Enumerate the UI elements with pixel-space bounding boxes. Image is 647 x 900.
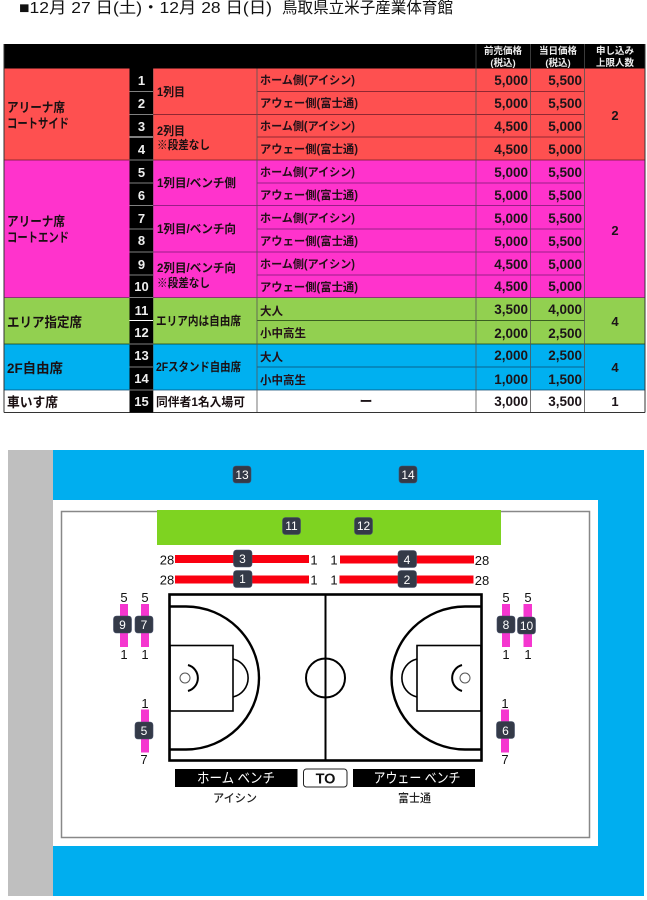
panel: 2F free seating rows: 2Fスタンド自由席 <box>156 359 241 374</box>
home bench: アイシン <box>213 792 257 805</box>
TO table: TO <box>316 772 335 788</box>
seat number column: 1 <box>138 73 145 88</box>
panel: arena court end rows: 2列目/ベンチ向 <box>157 260 236 275</box>
seat number column: 10 <box>134 279 149 294</box>
seat row end numbers: 1 <box>310 572 318 588</box>
panel: arena floor <box>53 500 598 846</box>
title <box>19 0 453 17</box>
panel: arena courtside rows: 2列目 <box>157 124 185 138</box>
seat badges: 4 <box>404 553 411 567</box>
panel: arena courtside rows: 5,000 <box>548 142 582 157</box>
panel: arena courtside rows: 1列目 <box>157 85 185 99</box>
panel: arena courtside rows: 5,500 <box>548 73 582 88</box>
panel: arena courtside rows: ホーム側(アイシン) <box>260 74 355 87</box>
table header: 前売価格 <box>484 45 522 57</box>
panel: arena court end rows: 5,000 <box>548 279 582 294</box>
seat badges: 10 <box>520 619 533 633</box>
panel: arena court end rows: コートエンド <box>7 230 69 245</box>
seat badges: 12 <box>357 519 370 533</box>
seat row end numbers: 1 <box>141 647 149 662</box>
panel: arena courtside rows: 5,000 <box>494 73 528 88</box>
table header: 上限人数 <box>596 57 634 69</box>
home bench: ホーム ベンチ <box>197 770 275 786</box>
seat badges: 9 <box>119 618 126 632</box>
seat number column: 9 <box>138 257 145 272</box>
panel: wheelchair row: 1 <box>611 394 619 409</box>
panel: arena courtside rows <box>4 68 645 160</box>
panel: area reserved zone <box>157 510 501 545</box>
seat row end numbers: 1 <box>141 696 149 711</box>
panel: 2F free seating rows: 2,500 <box>548 348 582 363</box>
panel: arena courtside rows: ※段差なし <box>157 137 210 152</box>
panel: 2F free seating rows <box>4 344 645 390</box>
price table <box>4 44 645 412</box>
panel: arena courtside rows: アウェー側(富士通) <box>260 96 358 110</box>
seat number column: 5 <box>138 165 145 180</box>
seat row end numbers: 28 <box>160 572 174 588</box>
panel: area reserved rows: 大人 <box>260 304 283 318</box>
panel: arena courtside rows: 4,500 <box>494 142 528 157</box>
panel: arena court end rows: 4,500 <box>494 279 528 294</box>
panel: area reserved rows: 4,000 <box>548 302 582 317</box>
seat number column: 3 <box>138 119 145 134</box>
seat row end numbers: 5 <box>141 590 149 605</box>
panel: arena courtside rows: ホーム側(アイシン) <box>260 120 355 133</box>
panel: arena court end rows: 4,500 <box>494 257 528 272</box>
panel: arena courtside rows: 5,000 <box>494 96 528 111</box>
title: ■12月 27 日(土)・12月 28 日(日) <box>19 0 272 17</box>
seat row end numbers: 1 <box>120 647 128 662</box>
panel: 2F free seating rows: 1,500 <box>548 372 582 387</box>
panel: arena court end rows: アウェー側(富士通) <box>260 280 358 294</box>
seat badges: 2 <box>404 573 411 587</box>
panel: arena court end rows: 5,000 <box>494 188 528 203</box>
seat number column: 7 <box>138 211 145 226</box>
seat badges: 11 <box>285 519 298 533</box>
seat row end numbers: 5 <box>502 590 510 605</box>
seat row end numbers: 1 <box>501 696 509 711</box>
panel: area reserved rows: エリア指定席 <box>7 314 82 330</box>
panel: arena court end rows: アウェー側(富士通) <box>260 234 358 248</box>
away bench: 富士通 <box>398 791 431 805</box>
seat row end numbers: 5 <box>524 590 532 605</box>
TO table <box>304 769 347 788</box>
panel: arena court end rows: アウェー側(富士通) <box>260 188 358 202</box>
panel: arena court end rows: ホーム側(アイシン) <box>260 212 355 225</box>
seat row end numbers: 1 <box>310 552 318 568</box>
table header: (税込) <box>545 57 571 69</box>
panel: arena court end rows: 5,000 <box>548 257 582 272</box>
seat row end numbers: 28 <box>160 552 174 568</box>
panel: arena court end rows: 5,000 <box>494 165 528 180</box>
seat row end numbers: 7 <box>501 752 509 767</box>
panel: arena court end rows: 5,500 <box>548 211 582 226</box>
seat number column: 2 <box>138 96 145 111</box>
panel: area reserved rows: 2,500 <box>548 326 582 341</box>
panel: arena court end rows: 2 <box>611 223 619 238</box>
seat badges: 14 <box>401 468 415 482</box>
table header: 申し込み <box>596 45 634 57</box>
panel: arena courtside rows: 5,500 <box>548 96 582 111</box>
panel: arena court end rows: ※段差なし <box>157 275 210 290</box>
panel: wheelchair row: 3,500 <box>548 394 582 409</box>
seat badges: 1 <box>239 572 246 586</box>
panel: area reserved rows <box>4 298 645 344</box>
away bench: アウェー ベンチ <box>374 770 460 786</box>
table header: 当日価格 <box>539 45 577 57</box>
seating map <box>8 450 644 896</box>
seat row end numbers <box>120 552 532 767</box>
panel: arena courtside rows: アウェー側(富士通) <box>260 142 358 156</box>
seat number column: 13 <box>134 348 149 363</box>
seat row end numbers: 1 <box>330 552 338 568</box>
seat number column: 12 <box>134 325 149 340</box>
seat number column: 6 <box>138 188 145 203</box>
panel: 2F free seating rows: 大人 <box>260 350 283 364</box>
panel: wheelchair row: 3,000 <box>494 394 528 409</box>
seat row end numbers: 28 <box>475 553 489 568</box>
panel: 2F free seating rows: 2F自由席 <box>7 360 63 376</box>
panel: area reserved rows: 小中高生 <box>260 326 306 340</box>
panel: wheelchair row: 同伴者1名入場可 <box>156 394 245 409</box>
seat number column: 11 <box>135 303 148 318</box>
seat badges: 7 <box>141 618 148 632</box>
seat number column <box>130 44 153 412</box>
table grid lines <box>4 44 645 412</box>
panel: area reserved rows: 2,000 <box>494 326 528 341</box>
red seat rows <box>175 555 474 584</box>
panel: area reserved rows: 4 <box>611 314 619 329</box>
panel: arena court end rows: 5,500 <box>548 234 582 249</box>
panel: arena courtside rows: 5,000 <box>548 119 582 134</box>
seat row end numbers: 7 <box>140 752 148 767</box>
seat badges: 6 <box>502 724 509 738</box>
panel: arena court end rows: ホーム側(アイシン) <box>260 258 355 271</box>
panel: 2F free seating rows: 1,000 <box>494 372 528 387</box>
seat number column: 8 <box>138 233 145 248</box>
seat badges: 8 <box>503 618 510 632</box>
table header <box>4 44 645 69</box>
panel: arena courtside rows: 4,500 <box>494 119 528 134</box>
seat badges: 3 <box>239 552 246 566</box>
panel: arena court end rows: 5,000 <box>494 211 528 226</box>
seat number column: 15 <box>134 394 149 409</box>
panel: wheelchair row <box>4 390 645 412</box>
panel: wheelchair row: 車いす席 <box>7 395 58 410</box>
seat number column: 14 <box>134 371 149 386</box>
away bench <box>353 769 475 805</box>
seat row end numbers: 1 <box>524 647 532 662</box>
seat row end numbers: 28 <box>475 573 489 588</box>
panel: arena courtside rows: コートサイド <box>7 116 69 131</box>
panel: 2F free seating rows: 小中高生 <box>260 373 306 387</box>
panel: arena courtside rows: 2 <box>611 108 619 123</box>
panel: arena court end rows: 1列目/ベンチ向 <box>157 221 236 236</box>
home bench <box>175 769 298 805</box>
table header: (税込) <box>490 57 516 69</box>
seat badges: 5 <box>141 724 148 738</box>
panel: arena court end rows: アリーナ席 <box>7 214 65 229</box>
seat number column: 4 <box>138 142 146 157</box>
panel: wheelchair row: ー <box>359 394 373 409</box>
panel: area reserved rows: 3,500 <box>494 302 528 317</box>
panel: arena court end rows: ホーム側(アイシン) <box>260 166 355 179</box>
panel: arena court end rows <box>4 160 645 298</box>
panel: arena court end rows: 5,500 <box>548 165 582 180</box>
panel: arena court end rows: 5,500 <box>548 188 582 203</box>
seat row end numbers: 1 <box>330 572 338 588</box>
panel: arena court end rows: 1列目/ベンチ側 <box>157 175 236 190</box>
seat badges: 13 <box>235 468 249 482</box>
seat row end numbers: 5 <box>120 590 128 605</box>
title: 鳥取県立米子産業体育館 <box>282 0 453 17</box>
panel: 2F free seating rows: 4 <box>611 360 619 375</box>
seat row end numbers: 1 <box>502 647 510 662</box>
panel: 2F stand <box>53 450 644 896</box>
panel: gray wall <box>8 450 53 896</box>
panel: arena courtside rows: アリーナ席 <box>7 100 65 115</box>
panel: arena court end rows: 5,000 <box>494 234 528 249</box>
panel: 2F free seating rows: 2,000 <box>494 348 528 363</box>
pink seat rows <box>120 604 532 752</box>
panel: area reserved rows: エリア内は自由席 <box>156 313 241 328</box>
seat badges <box>114 466 536 739</box>
basketball court <box>170 594 482 760</box>
